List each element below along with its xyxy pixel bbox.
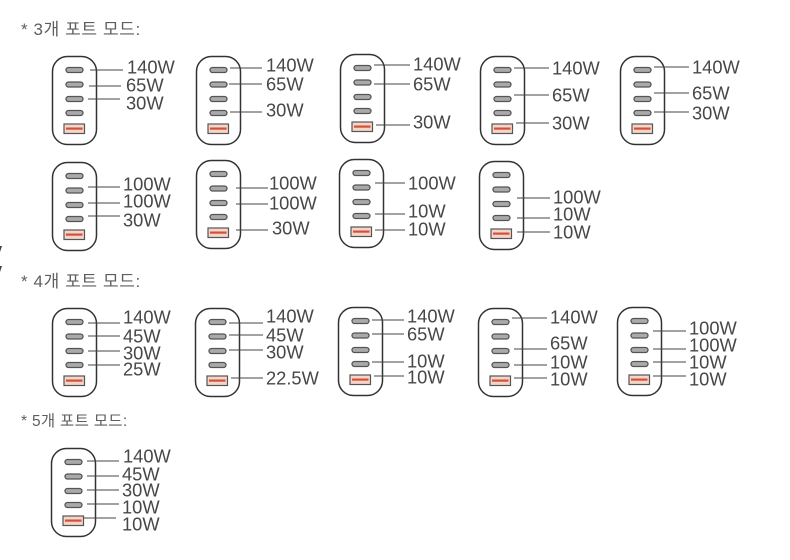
port labels: 140W xyxy=(552,58,601,78)
port labels xyxy=(88,174,172,230)
charger: 4-port 100W 100W 10W 10W xyxy=(618,308,738,396)
charger: 4-port 140W 45W 30W 25W xyxy=(52,306,172,396)
charger: 3-port 140W 65W 30W (5) xyxy=(620,56,741,144)
port labels xyxy=(517,186,602,242)
port labels: 140W xyxy=(413,54,462,74)
charger: 3-port 140W 65W 30W (3) xyxy=(340,54,462,142)
port labels: 10W xyxy=(407,350,445,372)
icon: charger body xyxy=(52,162,96,250)
icon: charger body xyxy=(340,54,384,142)
port labels: 140W xyxy=(266,306,315,326)
port labels: 140W xyxy=(266,54,315,76)
port labels: 45W xyxy=(123,326,161,346)
port labels: 10W xyxy=(122,496,160,518)
port labels: 10W xyxy=(550,352,588,372)
charger: 4-port 140W 65W 10W 10W (2) xyxy=(478,306,599,396)
port labels: 10W xyxy=(408,218,446,240)
port labels: 65W xyxy=(266,74,304,94)
icon: charger body xyxy=(196,160,240,248)
port labels: 65W xyxy=(550,332,588,354)
port labels xyxy=(229,306,320,388)
port labels: 10W xyxy=(553,204,591,224)
port labels: 10W xyxy=(550,368,588,390)
port labels xyxy=(372,306,456,388)
heading: 3-port mode: * 3개 포트 모드: xyxy=(21,20,141,39)
port labels: 30W xyxy=(123,210,161,230)
charger: 5-port 140W 45W 30W 10W 10W xyxy=(52,446,172,536)
port labels: 30W xyxy=(552,112,590,134)
icon: charger body xyxy=(620,56,664,144)
port labels xyxy=(514,58,601,134)
port labels: 30W xyxy=(272,218,310,238)
port labels: 100W xyxy=(408,172,457,194)
edge marks xyxy=(0,246,2,272)
charger: 3-port 100W 100W 30W (1) xyxy=(52,162,172,250)
port labels: 100W xyxy=(269,172,318,194)
port labels xyxy=(375,172,457,240)
port labels xyxy=(84,446,172,534)
charger: 3-port 140W 65W 30W (2) xyxy=(196,54,315,144)
icon: charger body xyxy=(340,160,384,248)
port labels: 140W xyxy=(407,306,456,326)
icon: charger body xyxy=(338,308,382,396)
port labels xyxy=(654,56,741,124)
port labels: 140W xyxy=(550,306,599,328)
port labels xyxy=(374,54,462,132)
port labels xyxy=(229,54,315,120)
port labels: 10W xyxy=(408,200,446,222)
port labels: 25W xyxy=(123,358,161,380)
icon: charger body xyxy=(52,308,96,396)
charger: 4-port 140W 65W 10W 10W xyxy=(338,306,456,396)
port labels: 10W xyxy=(407,366,445,388)
port labels xyxy=(236,172,318,238)
charger: 3-port 100W 100W 30W (2) xyxy=(196,160,318,248)
port labels xyxy=(88,306,172,380)
charger: 3-port 100W 10W 10W (1) xyxy=(340,160,457,248)
port labels: 30W xyxy=(126,92,164,114)
port labels: 65W xyxy=(692,82,730,104)
port labels: 10W xyxy=(122,514,160,534)
port labels: 30W xyxy=(413,112,451,132)
port labels: 140W xyxy=(123,306,172,328)
port labels: 100W xyxy=(689,334,738,356)
port labels: 65W xyxy=(413,74,451,94)
heading: 4-port mode: * 4개 포트 모드: xyxy=(21,272,141,291)
port labels: 140W xyxy=(692,56,741,78)
port labels: 65W xyxy=(126,74,164,96)
port labels: 45W xyxy=(122,464,160,484)
port labels: 65W xyxy=(407,324,445,344)
charger: 3-port 100W 10W 10W (2) xyxy=(480,162,602,250)
charger: 3-port 140W 65W 30W (1) xyxy=(52,56,176,144)
port labels: 100W xyxy=(269,192,318,214)
icon: charger body xyxy=(480,162,524,250)
icon: charger body xyxy=(52,448,96,536)
icon: charger body xyxy=(478,308,522,396)
icon: charger body xyxy=(196,308,240,396)
port labels: 100W xyxy=(123,174,172,194)
charger: 3-port 140W 65W 30W (4) xyxy=(480,56,601,144)
port labels: 22.5W xyxy=(266,368,320,388)
port labels: 45W xyxy=(266,324,304,346)
port labels: 30W xyxy=(266,100,304,120)
icon: charger body xyxy=(480,56,524,144)
port labels: 30W xyxy=(692,102,730,124)
port labels: 140W xyxy=(127,56,176,78)
port labels xyxy=(512,306,599,390)
port labels: 100W xyxy=(553,186,602,208)
port labels: 10W xyxy=(689,352,727,372)
icon: charger body xyxy=(52,56,96,144)
port labels: 30W xyxy=(122,480,160,500)
port labels: 30W xyxy=(123,342,161,364)
port labels: 100W xyxy=(689,318,738,338)
icon: charger body xyxy=(618,308,662,396)
icon: charger body xyxy=(196,56,240,144)
port labels xyxy=(88,56,176,114)
port labels: 100W xyxy=(123,190,172,212)
charger: 4-port 140W 45W 30W 22.5W xyxy=(196,306,320,396)
port labels: 30W xyxy=(266,342,304,362)
heading: 5-port mode: * 5개 포트 모드: xyxy=(21,412,127,430)
port labels: 140W xyxy=(123,446,172,466)
port labels: 65W xyxy=(552,84,590,106)
port labels xyxy=(653,318,738,390)
port labels: 10W xyxy=(553,222,591,242)
port labels: 10W xyxy=(689,368,727,390)
